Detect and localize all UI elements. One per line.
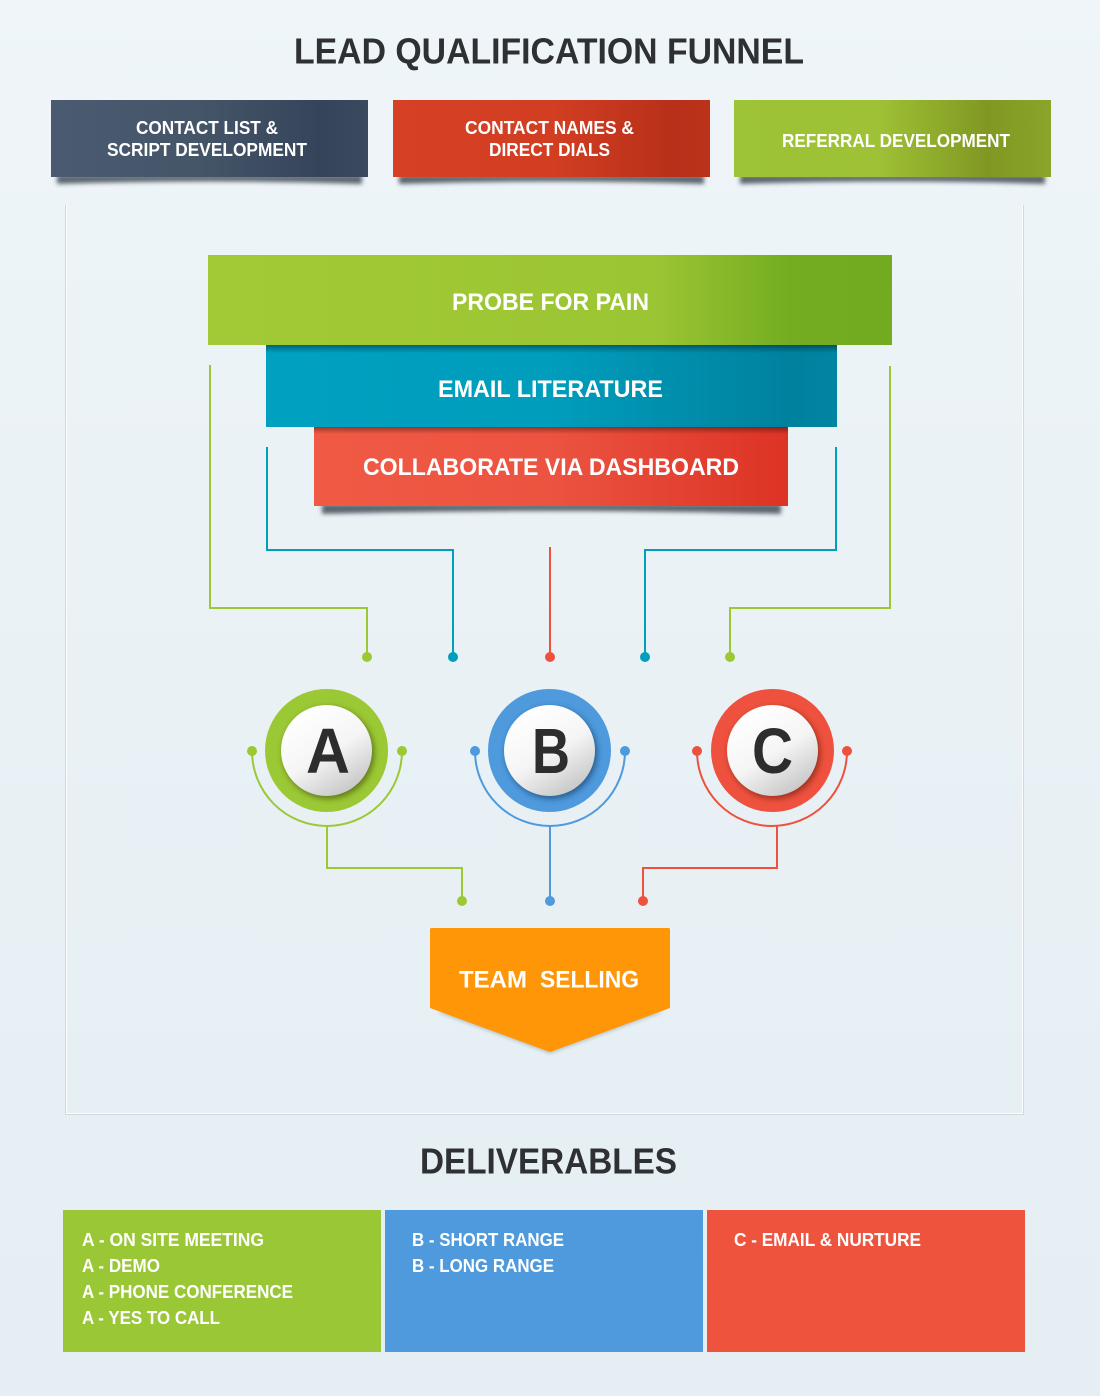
connector: blue left	[267, 447, 458, 662]
connector: blue right	[640, 447, 836, 662]
funnel bar: email literature	[266, 345, 837, 427]
panel: contact list and script development: SCRIPT DEVELOPMENT	[107, 140, 307, 160]
circle badge C	[692, 689, 852, 826]
connector: green right to C	[725, 366, 890, 662]
funnel bar: collaborate via dashboard: COLLABORATE VIA DASHBOARD	[363, 454, 739, 481]
funnel bar: collaborate via dashboard	[314, 427, 788, 514]
team selling pentagon: TEAM	[459, 966, 527, 994]
panel: contact names and direct dials: CONTACT NAMES &	[465, 118, 634, 138]
deliverable panel C: C - EMAIL & NURTURE	[734, 1230, 921, 1250]
deliverable panel A: A - PHONE CONFERENCE	[82, 1282, 293, 1302]
circle badge C: C	[752, 715, 793, 787]
panel: referral development: REFERRAL DEVELOPMENT	[782, 131, 1010, 151]
deliverable panel B: B - SHORT RANGE	[412, 1230, 564, 1250]
panel: referral development	[734, 100, 1051, 184]
team selling pentagon	[432, 930, 668, 1054]
circle badge A	[247, 689, 407, 826]
deliverable panel A	[63, 1210, 381, 1352]
funnel bar: probe for pain	[208, 255, 892, 345]
panel: contact names and direct dials	[393, 100, 710, 184]
circle badge B	[470, 689, 630, 826]
connector: red centre	[545, 547, 555, 662]
circle badge A: A	[306, 715, 350, 787]
deliverable panel C	[707, 1210, 1025, 1352]
connector: C to team selling	[638, 826, 777, 906]
deliverable panel A: A - ON SITE MEETING	[82, 1230, 264, 1250]
deliverable panel A: A - YES TO CALL	[82, 1308, 220, 1328]
connector: green left to A	[210, 365, 372, 662]
circle badge B: B	[532, 715, 570, 787]
connector: B to team selling	[545, 826, 555, 906]
funnel bar: email literature: EMAIL LITERATURE	[438, 376, 663, 403]
deliverable panel B: B - LONG RANGE	[412, 1256, 554, 1276]
deliverable panel B	[385, 1210, 703, 1352]
panel: contact list and script development	[51, 100, 368, 184]
panel: funnel frame	[66, 205, 1024, 1114]
title: LEAD QUALIFICATION FUNNEL	[294, 30, 804, 72]
panel: contact list and script development: CONTACT LIST &	[136, 118, 278, 138]
connector: A to team selling	[327, 826, 467, 906]
panel: contact names and direct dials: DIRECT DIALS	[489, 140, 610, 160]
deliverables heading: DELIVERABLES	[420, 1140, 677, 1182]
team selling pentagon: SELLING	[540, 966, 639, 994]
deliverable panel A: A - DEMO	[82, 1256, 160, 1276]
funnel bar: probe for pain: PROBE FOR PAIN	[452, 289, 649, 316]
